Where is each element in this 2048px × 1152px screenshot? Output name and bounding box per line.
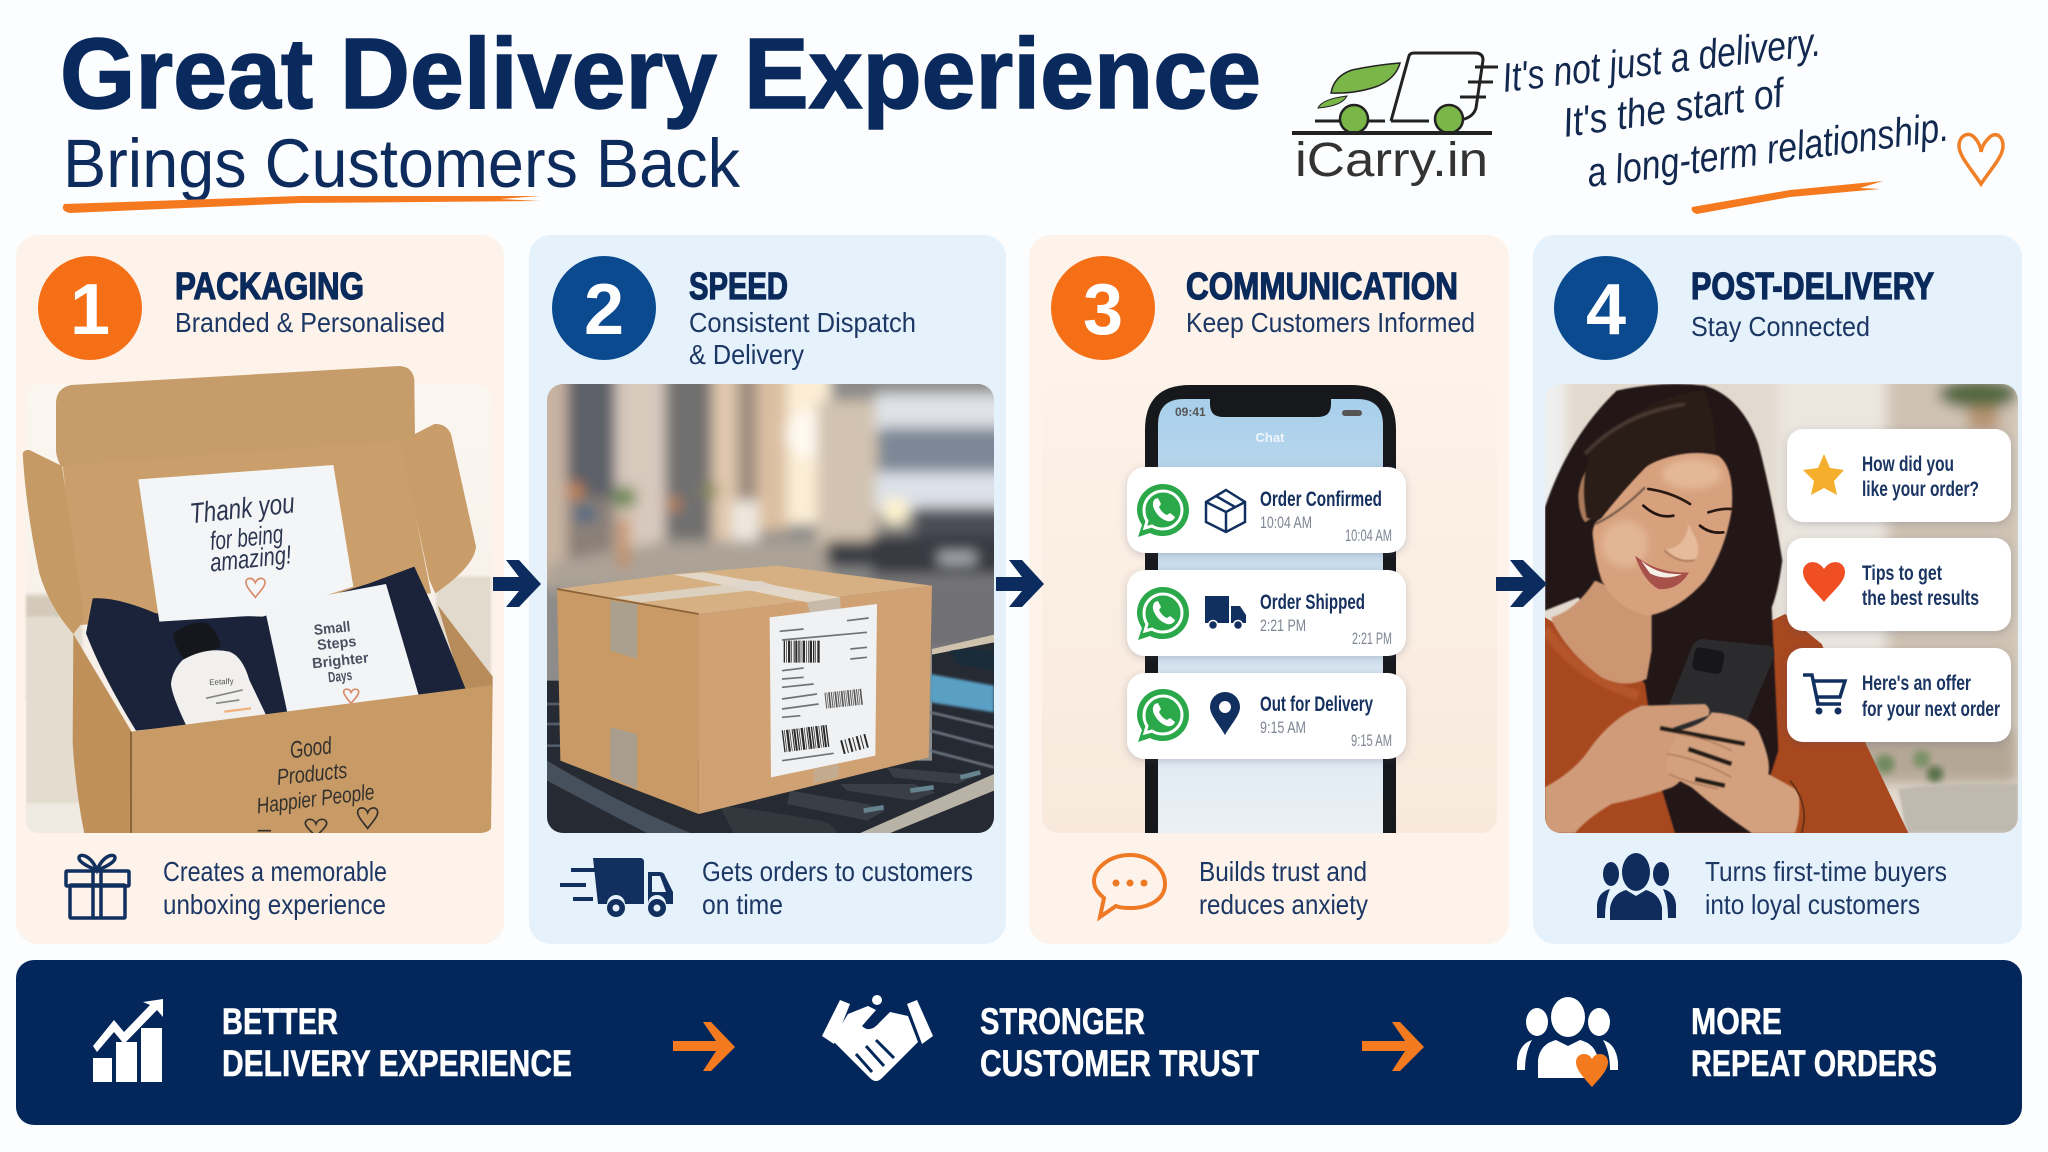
photo: open branded box bbox=[23, 366, 493, 837]
chat card: feedback: How did you bbox=[1862, 453, 1954, 476]
icon: box bbox=[1206, 490, 1245, 532]
repeat orders text: MORE bbox=[1691, 1001, 1782, 1042]
small steps card: Small bbox=[313, 619, 351, 639]
small steps card: Brighter bbox=[311, 650, 370, 672]
thank-you card: Thank you bbox=[188, 487, 296, 530]
step number 4 bbox=[1554, 256, 1658, 360]
speed subheading: & Delivery bbox=[689, 339, 804, 370]
communication heading: COMMUNICATION bbox=[1186, 266, 1458, 308]
shipping label bbox=[770, 604, 877, 777]
box lettering: Good bbox=[288, 732, 334, 764]
tagline brush stroke bbox=[1692, 181, 1883, 214]
notification: order shipped: 2:21 PM bbox=[1352, 629, 1392, 648]
tagline: It's not just a delivery. bbox=[1500, 18, 1823, 101]
post-delivery subheading: Stay Connected bbox=[1691, 311, 1870, 342]
post-delivery caption: into loyal customers bbox=[1705, 889, 1920, 920]
outcome banner bbox=[16, 960, 2022, 1125]
notification: order confirmed: 10:04 AM bbox=[1345, 526, 1392, 545]
smile bbox=[1635, 556, 1689, 589]
hands bbox=[1545, 704, 1799, 833]
panel: post-delivery bbox=[1525, 235, 2038, 944]
parcel bbox=[557, 566, 932, 814]
step number 4: 4 bbox=[1586, 270, 1626, 350]
panel: packaging bbox=[16, 235, 504, 944]
tagline bbox=[1500, 18, 1951, 196]
phone in hand bbox=[1669, 639, 1774, 730]
room background bbox=[1545, 384, 2018, 833]
bottle: Eetalfy bbox=[209, 677, 234, 687]
icon: gift bbox=[66, 855, 129, 918]
notification: order shipped: 2:21 PM bbox=[1260, 616, 1306, 635]
panel: communication bbox=[1029, 235, 1509, 944]
icon: star bbox=[1803, 454, 1844, 495]
chat card: tips bbox=[1787, 538, 2011, 631]
icon: small truck bbox=[1205, 596, 1246, 630]
small steps card: Steps bbox=[316, 634, 357, 654]
icon: customers group bbox=[1597, 853, 1676, 920]
small steps card bbox=[264, 584, 419, 714]
photo: parcel on conveyor bbox=[547, 384, 994, 833]
bottle bbox=[171, 623, 268, 725]
chat card: offer bbox=[1787, 648, 2011, 742]
arrow: communication to post-delivery bbox=[1496, 560, 1547, 607]
communication caption bbox=[1199, 856, 1368, 920]
tagline: a long-term relationship. bbox=[1584, 103, 1951, 196]
icon: delivery truck bbox=[560, 858, 673, 917]
speed subheading bbox=[689, 307, 916, 370]
facial features bbox=[1643, 489, 1732, 533]
notification: order confirmed bbox=[1127, 467, 1406, 553]
packaging caption: Creates a memorable bbox=[163, 856, 387, 887]
icon: people with heart bbox=[1517, 997, 1618, 1087]
icon: location pin bbox=[1210, 692, 1240, 735]
speed heading: SPEED bbox=[689, 266, 788, 308]
better delivery text: BETTER bbox=[222, 1001, 338, 1042]
tagline: It's the start of bbox=[1560, 69, 1789, 146]
step number 3: 3 bbox=[1083, 270, 1123, 350]
notification: order shipped: Order Shipped bbox=[1260, 591, 1365, 614]
repeat orders text: REPEAT ORDERS bbox=[1691, 1043, 1937, 1084]
post-delivery caption bbox=[1705, 856, 1947, 920]
arrow: orange one bbox=[673, 1022, 735, 1071]
communication caption: Builds trust and bbox=[1199, 856, 1367, 887]
arrow: orange two bbox=[1362, 1022, 1424, 1071]
speed caption: Gets orders to customers bbox=[702, 856, 973, 887]
arrow: speed to communication bbox=[996, 560, 1044, 607]
chat card: tips: Tips to get bbox=[1862, 562, 1942, 585]
face bbox=[1578, 453, 1732, 616]
packaging caption bbox=[163, 856, 387, 920]
box lettering bbox=[255, 732, 378, 837]
chat card: feedback bbox=[1787, 429, 2011, 522]
speed caption: on time bbox=[702, 889, 783, 920]
step number 3 bbox=[1051, 256, 1155, 360]
thank-you card: for being bbox=[208, 518, 285, 556]
photo: woman with phone bbox=[1545, 384, 2018, 833]
chat card: offer: Here's an offer bbox=[1862, 672, 1971, 695]
thank-you card bbox=[138, 465, 353, 622]
step number 2 bbox=[552, 256, 656, 360]
packaging heading: PACKAGING bbox=[175, 266, 364, 308]
notification: out for delivery bbox=[1127, 673, 1406, 759]
step number 1 bbox=[38, 256, 142, 360]
phone bbox=[1145, 385, 1396, 833]
subtitle brush underline bbox=[63, 196, 540, 213]
chat card: feedback: like your order? bbox=[1862, 478, 1979, 501]
icon: chat bubble bbox=[1094, 855, 1165, 917]
thank-you card: amazing! bbox=[208, 539, 293, 578]
better delivery text: DELIVERY EXPERIENCE bbox=[222, 1043, 572, 1084]
title: Great Delivery Experience bbox=[60, 18, 1261, 130]
icon: red heart bbox=[1803, 562, 1845, 602]
logo: iCarry.in bbox=[1292, 53, 1498, 187]
notification: order confirmed: Order Confirmed bbox=[1260, 488, 1382, 511]
notification: out for delivery: 9:15 AM bbox=[1351, 731, 1392, 750]
phone: Chat bbox=[1256, 430, 1285, 445]
communication subheading: Keep Customers Informed bbox=[1186, 307, 1475, 338]
conveyor rollers bbox=[547, 635, 994, 833]
subtitle: Brings Customers Back bbox=[63, 125, 740, 202]
communication caption: reduces anxiety bbox=[1199, 889, 1368, 920]
speed subheading: Consistent Dispatch bbox=[689, 307, 916, 338]
notification: out for delivery: Out for Delivery bbox=[1260, 693, 1373, 716]
step number 2: 2 bbox=[584, 270, 624, 350]
notification: order shipped bbox=[1127, 570, 1406, 656]
box lettering: Products bbox=[275, 757, 348, 790]
panel: speed bbox=[527, 235, 1015, 944]
chat card: offer: for your next order bbox=[1862, 698, 2000, 721]
icon: cart bbox=[1803, 675, 1845, 714]
neck bbox=[1552, 581, 1652, 684]
step number 1: 1 bbox=[70, 270, 110, 350]
logo: iCarry.in: iCarry.in bbox=[1295, 134, 1488, 187]
stronger trust text: CUSTOMER TRUST bbox=[980, 1043, 1259, 1084]
beige photo backdrop bbox=[1042, 384, 1497, 833]
chat card: tips: the best results bbox=[1862, 587, 1979, 610]
notification: order confirmed: 10:04 AM bbox=[1260, 513, 1312, 532]
packaging caption: unboxing experience bbox=[163, 889, 386, 920]
icon: tagline heart bbox=[1959, 134, 2003, 184]
sweater bbox=[1545, 614, 1908, 833]
hair back bbox=[1545, 384, 1782, 833]
better delivery text bbox=[222, 1001, 572, 1084]
notification: out for delivery: 9:15 AM bbox=[1260, 718, 1306, 737]
small steps card: Days bbox=[327, 668, 353, 686]
packaging subheading: Branded & Personalised bbox=[175, 307, 445, 338]
repeat orders text bbox=[1691, 1001, 1937, 1084]
post-delivery heading: POST-DELIVERY bbox=[1691, 266, 1934, 308]
icon: handshake bbox=[822, 995, 933, 1081]
phone: 09:41 bbox=[1175, 405, 1206, 419]
post-delivery caption: Turns first-time buyers bbox=[1705, 856, 1947, 887]
stronger trust text: STRONGER bbox=[980, 1001, 1145, 1042]
icon: growth chart bbox=[93, 999, 163, 1082]
speed caption bbox=[702, 856, 973, 920]
arrow: packaging to speed bbox=[493, 560, 541, 607]
stronger trust text bbox=[980, 1001, 1259, 1084]
front hair bbox=[1584, 391, 1716, 520]
box lettering: Happier People bbox=[255, 779, 376, 818]
